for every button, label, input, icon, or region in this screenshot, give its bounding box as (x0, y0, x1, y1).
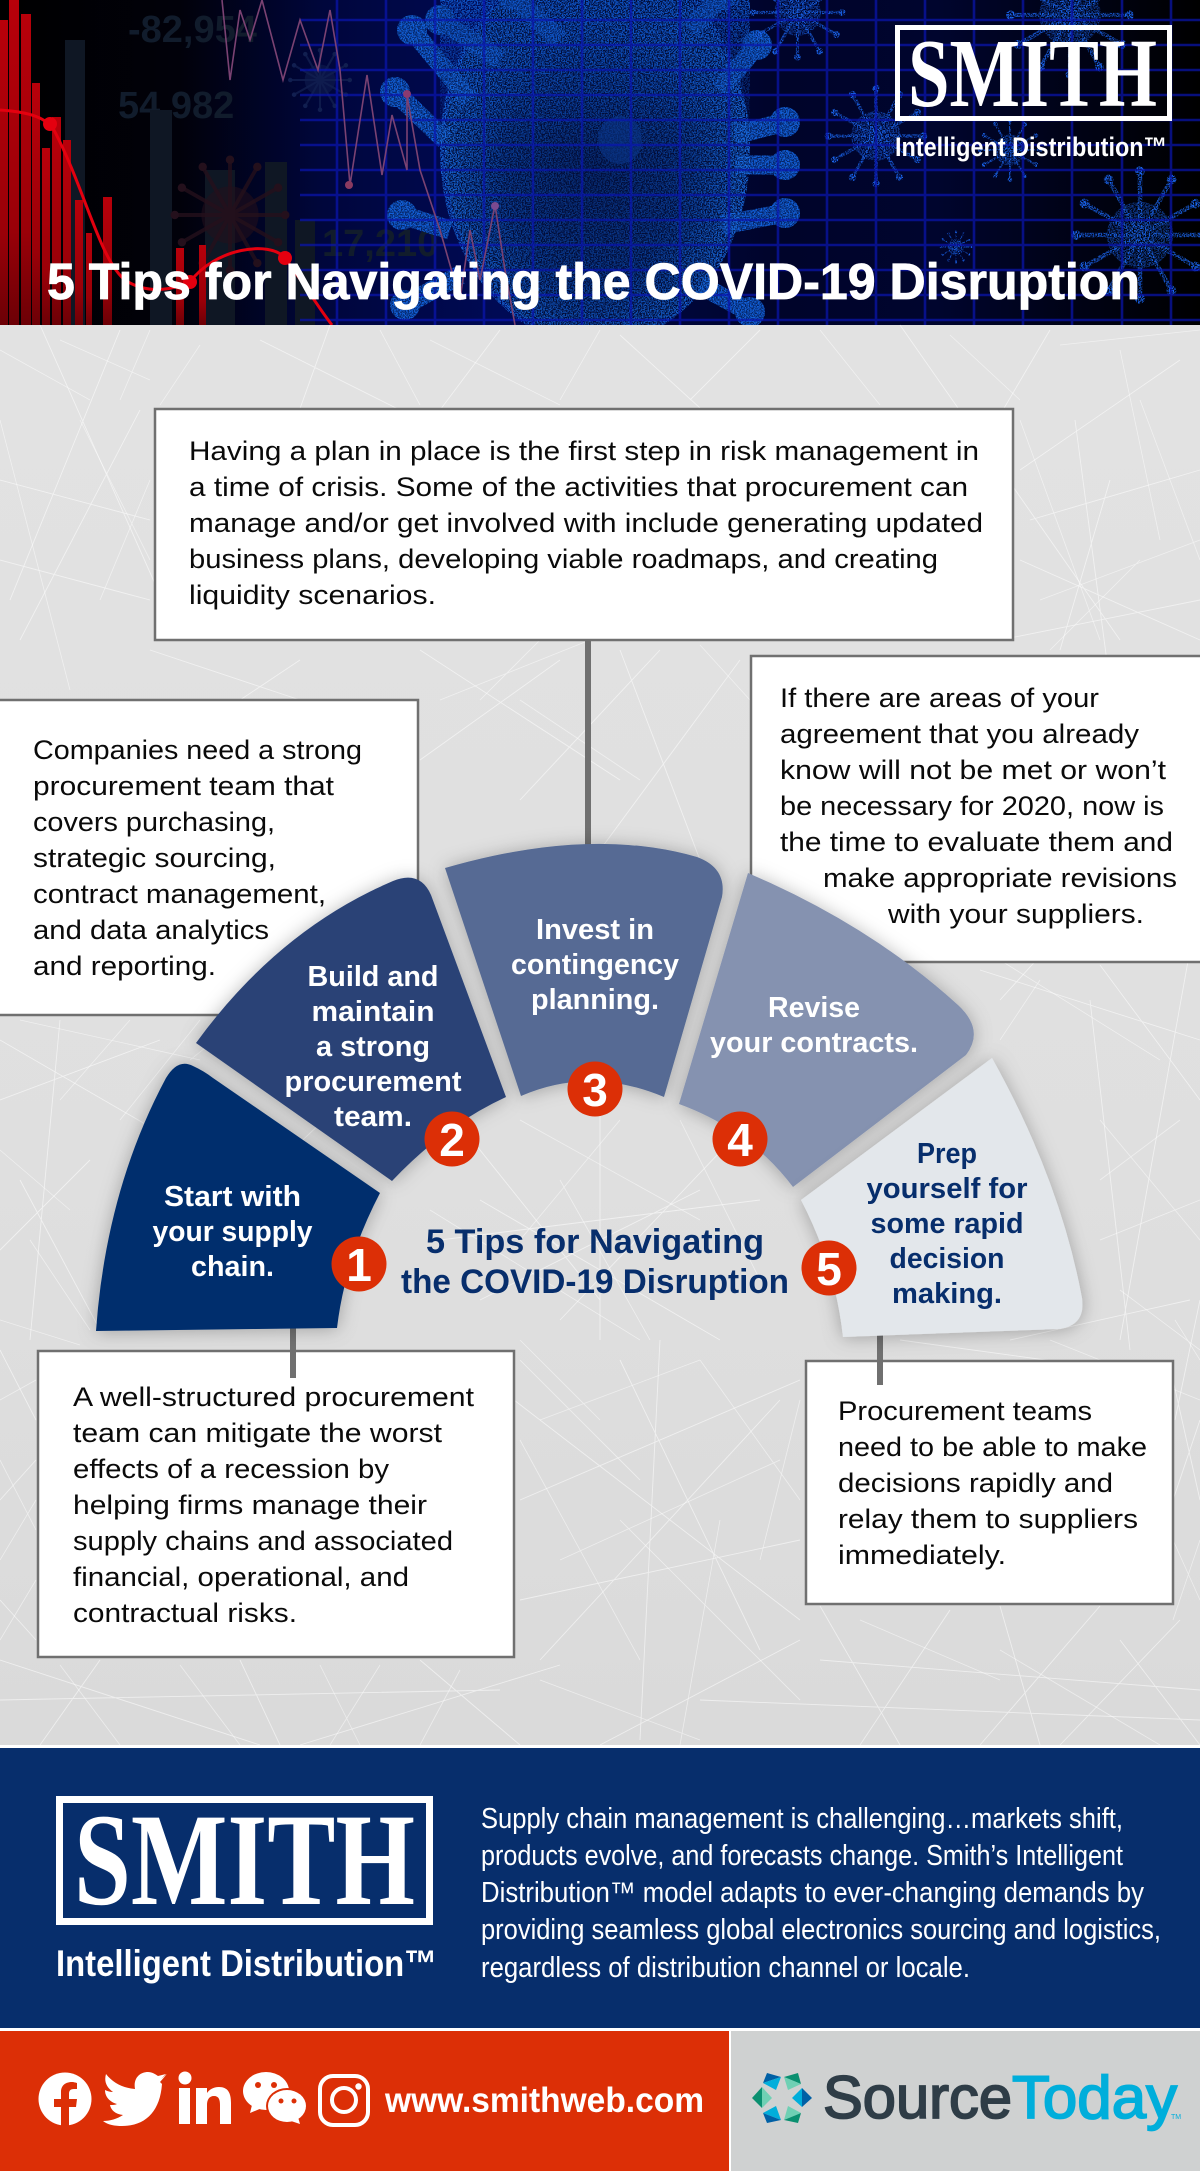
fan segment 1: supply chain (96, 1064, 380, 1331)
fan segment 2: build and maintain (196, 878, 506, 1181)
header banner (0, 0, 1200, 345)
text box: rapid decisions: Procurement teams (838, 1396, 1092, 1426)
panel: SourceToday logo (731, 2031, 1200, 2171)
header logo: Intelligent Distribution™ (895, 132, 1167, 162)
main panel background (0, 325, 1200, 1745)
fan segment 2: build and maintain: team. (334, 1101, 412, 1133)
text box: procurement team: contract management, (33, 879, 326, 909)
main title: 5 Tips for Navigating the COVID-19 Disruption (47, 253, 1140, 310)
fan segment 5: rapid decisions: some rapid (870, 1208, 1024, 1240)
company description: products evolve, and forecasts change. Smith’s Intelligent (481, 1840, 1123, 1872)
white divider band (0, 1745, 1200, 1748)
fan segment 5: rapid decisions: yourself for (866, 1173, 1028, 1205)
text box: supply chain: contractual risks. (73, 1598, 297, 1628)
center heading: the COVID-19 Disruption (401, 1263, 789, 1301)
fan segment 3: contingency planning: contingency (511, 949, 679, 981)
text box: contingency planning: Having a plan in place is the first step in risk management in (189, 436, 979, 466)
company description: Supply chain management is challenging…markets shift, (481, 1803, 1123, 1835)
fan segment 5: rapid decisions: Prep (917, 1138, 977, 1170)
text box: rapid decisions: relay them to suppliers (838, 1504, 1138, 1534)
text box: revise contracts: be necessary for 2020, now is (780, 791, 1164, 821)
fan segment 4: revise contracts: Revise (768, 992, 860, 1024)
connector: supply chain box (290, 1326, 296, 1378)
text box: rapid decisions: immediately. (838, 1540, 1006, 1570)
number badge 5: 5 (816, 1243, 842, 1295)
icon: linkedin (178, 2072, 231, 2124)
text box: supply chain: helping firms manage their (73, 1490, 427, 1520)
icon: wechat (243, 2072, 308, 2124)
number badge 3: 3 (582, 1064, 608, 1116)
number badge 3 (568, 1062, 622, 1116)
text box: rapid decisions: decisions rapidly and (838, 1468, 1113, 1498)
text box: revise contracts: If there are areas of your (780, 683, 1099, 713)
text box: procurement team: Companies need a strong (33, 735, 362, 765)
fan segment 4: revise contracts (679, 873, 974, 1187)
text box: revise contracts: agreement that you already (780, 719, 1140, 749)
text box: revise contracts: know will not be met or won’t (780, 755, 1167, 785)
header: dim bar columns (65, 40, 315, 325)
footer logo (56, 1786, 437, 1984)
text box: rapid decisions: need to be able to make (838, 1432, 1147, 1462)
fan segment 2: build and maintain: a strong (316, 1031, 430, 1063)
text box: contingency planning: business plans, developing viable roadmaps, and creating (189, 544, 938, 574)
header: dim data numbers: 17,210 (322, 223, 438, 265)
number badge 4 (712, 1112, 768, 1166)
fan segment 2: build and maintain: Build and (308, 961, 438, 993)
fan segment 4: revise contracts: your contracts. (710, 1027, 918, 1059)
header: falling line chart (222, 0, 515, 325)
footer logo: Intelligent Distribution™ (56, 1943, 437, 1984)
fan segment 1: supply chain: your supply (152, 1216, 312, 1248)
number badge 4: 4 (727, 1114, 753, 1166)
text box: supply chain: effects of a recession by (73, 1454, 390, 1484)
text box: revise contracts (751, 656, 1200, 962)
fan segment 5: rapid decisions: decision (890, 1243, 1004, 1275)
header: large virus (395, 0, 785, 345)
text box: procurement team: covers purchasing, (33, 807, 275, 837)
fan segment 3: contingency planning (445, 844, 723, 1097)
center heading (401, 1223, 789, 1301)
SourceToday wordmark (823, 2064, 1181, 2131)
SourceToday wordmark: TM (1171, 2114, 1181, 2121)
icon: facebook (38, 2072, 92, 2126)
center heading: 5 Tips for Navigating (426, 1223, 764, 1261)
header: dim viruses on the left (175, 50, 350, 270)
company description (481, 1803, 1161, 1984)
text box: contingency planning (155, 409, 1013, 640)
text box: procurement team: and reporting. (33, 951, 216, 981)
company description: Distribution™ model adapts to ever-changing demands by (481, 1877, 1145, 1909)
text box: supply chain: financial, operational, and (73, 1562, 409, 1592)
fan segment 3: contingency planning: planning. (531, 984, 659, 1016)
text box: supply chain: team can mitigate the worst (73, 1418, 443, 1448)
text box: revise contracts: with your suppliers. (887, 899, 1144, 929)
number badge 2: 2 (439, 1114, 465, 1166)
text box: revise contracts: make appropriate revisions (823, 863, 1177, 893)
text box: supply chain: supply chains and associated (73, 1526, 453, 1556)
header: dim data numbers: 54,982 (118, 85, 234, 127)
fan segment 1: supply chain: chain. (191, 1251, 274, 1283)
text box: rapid decisions (806, 1361, 1173, 1604)
connector: top box (585, 638, 591, 850)
text box: procurement team: procurement team that (33, 771, 335, 801)
number badge 1 (332, 1236, 386, 1292)
SourceToday wordmark: Source (823, 2064, 1012, 2131)
fan segment 2: build and maintain: procurement (284, 1066, 462, 1098)
number badge 2 (424, 1112, 480, 1166)
header: red trend curve (0, 110, 332, 325)
fan segment 5: rapid decisions: making. (892, 1278, 1002, 1310)
text box: contingency planning: liquidity scenarios. (189, 580, 436, 610)
text box: procurement team: strategic sourcing, (33, 843, 276, 873)
footer logo: SMITH (74, 1786, 415, 1933)
SourceToday wordmark: Today (1012, 2064, 1177, 2131)
icon: SourceToday star (752, 2073, 812, 2123)
number badge 1: 1 (346, 1239, 372, 1291)
fan segment 2: build and maintain: maintain (312, 996, 434, 1028)
fan segment 3: contingency planning: Invest in (536, 914, 654, 946)
header logo (895, 20, 1170, 162)
panel: social links (0, 2031, 729, 2171)
icon: twitter (103, 2072, 167, 2126)
header: grid lines (300, 0, 1200, 325)
text box: procurement team: and data analytics (33, 915, 269, 945)
text box: supply chain: A well-structured procurement (73, 1382, 475, 1412)
fan segment 1: supply chain: Start with (164, 1181, 301, 1213)
icon: instagram (320, 2076, 368, 2125)
header: dim data numbers (118, 9, 438, 265)
header: red bars (0, 0, 206, 325)
fan segment 5: rapid decisions (801, 1058, 1082, 1337)
company description: regardless of distribution channel or locale. (481, 1952, 970, 1984)
text box: supply chain (38, 1351, 514, 1657)
connector: rapid decisions box (877, 1332, 883, 1385)
number badge 5 (802, 1240, 856, 1296)
text box: procurement team (0, 700, 418, 1015)
white divider band 2 (0, 2028, 1200, 2031)
text box: contingency planning: manage and/or get involved with include generating updated (189, 508, 983, 538)
panel: company footer (0, 1748, 1200, 2028)
website link: www.smithweb.com (384, 2081, 704, 2120)
header: small viruses (753, 0, 1200, 299)
text box: revise contracts: the time to evaluate them and (780, 827, 1173, 857)
text box: contingency planning: a time of crisis. Some of the activities that procurement can (189, 472, 968, 502)
header: dim data numbers: -82,954 (128, 9, 257, 51)
